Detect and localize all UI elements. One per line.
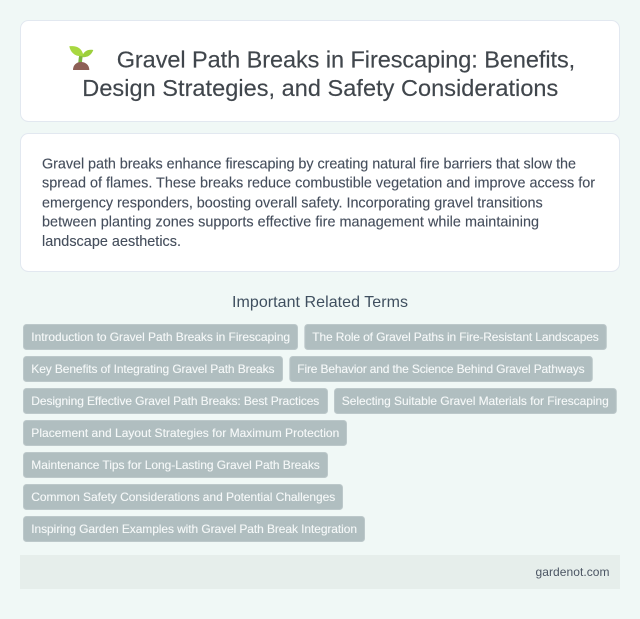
tag 4: Fire Behavior and the Science Behind Gravel Pathways	[297, 362, 585, 376]
tag 3	[24, 356, 282, 382]
tag 7	[24, 420, 346, 446]
intro paragraph	[42, 156, 595, 250]
tag 10: Inspiring Garden Examples with Gravel Path Break Integration	[31, 522, 357, 536]
tag 1: Introduction to Gravel Path Breaks in Firescaping	[31, 330, 290, 344]
tag 9: Common Safety Considerations and Potential Challenges	[31, 490, 335, 504]
tag 2	[305, 324, 606, 350]
intro paragraph: Gravel path breaks enhance firescaping by creating natural fire barriers that slow the	[42, 156, 576, 172]
tag 1	[24, 324, 298, 350]
panel: intro text card	[20, 134, 620, 272]
intro paragraph: landscape aesthetics.	[42, 234, 181, 250]
tag 8: Maintenance Tips for Long-Lasting Gravel Path Breaks	[31, 458, 320, 472]
tag 9	[24, 484, 342, 510]
tag 8	[24, 452, 328, 478]
tag 2: The Role of Gravel Paths in Fire-Resistant Landscapes	[312, 330, 599, 344]
intro paragraph: emergency responders, boosting overall safety. Incorporating gravel transitions	[42, 195, 543, 211]
title	[82, 46, 575, 101]
tag 10	[24, 516, 364, 542]
tag 6: Selecting Suitable Gravel Materials for Firescaping	[342, 394, 609, 408]
panel: title card	[20, 20, 620, 122]
intro paragraph: spread of flames. These breaks reduce combustible vegetation and improve access for	[42, 176, 595, 192]
footer bar	[20, 555, 620, 589]
icon: seedling	[69, 46, 93, 70]
tag 5	[24, 388, 328, 414]
tag 6	[334, 388, 616, 414]
tag 3: Key Benefits of Integrating Gravel Path Breaks	[31, 362, 274, 376]
title: Design Strategies, and Safety Considerations	[82, 75, 558, 101]
intro paragraph: between planting zones supports effective fire management while maintaining	[42, 215, 539, 231]
heading: related terms: Important Related Terms	[232, 294, 408, 311]
related term tags	[24, 324, 616, 542]
title: Gravel Path Breaks in Firescaping: Benefits,	[117, 46, 575, 72]
tag 5: Designing Effective Gravel Path Breaks: Best Practices	[31, 394, 319, 408]
footer source text: gardenot.com	[536, 565, 610, 579]
tag 4	[290, 356, 592, 382]
tag 7: Placement and Layout Strategies for Maximum Protection	[31, 426, 339, 440]
